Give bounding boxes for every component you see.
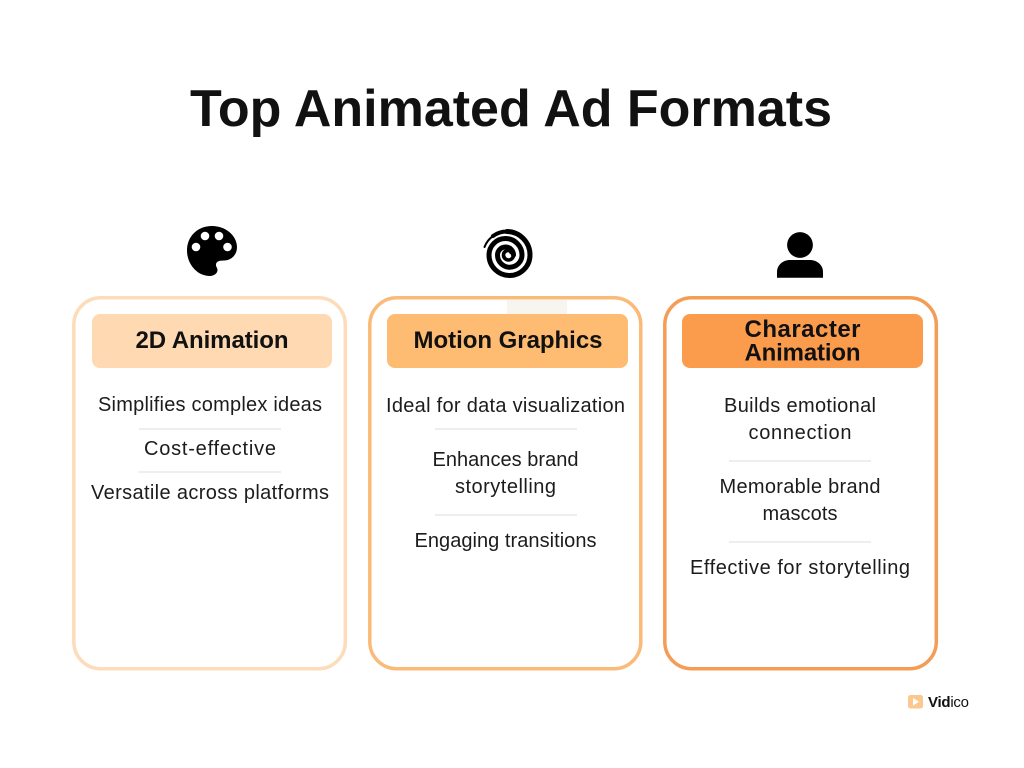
list: Character Animation points: Effective for storytelling — [690, 557, 910, 579]
list: Motion Graphics points: Enhances brand — [432, 449, 578, 471]
list: Character Animation points: mascots — [762, 503, 838, 525]
panel: Motion Graphics — [370, 298, 641, 669]
heading: Character Animation: Character — [744, 316, 860, 343]
heading: Motion Graphics — [387, 314, 628, 368]
list: Motion Graphics points: Ideal for data visualization — [386, 395, 625, 417]
list: 2D Animation points: Cost-effective — [144, 438, 276, 460]
list: 2D Animation points — [91, 394, 329, 504]
heading: 2D Animation — [92, 314, 332, 368]
logo: Vidico: Vidico — [928, 694, 969, 711]
panel: Character Animation — [665, 298, 936, 669]
list: 2D Animation points: Simplifies complex ideas — [98, 394, 322, 416]
list: 2D Animation points: Versatile across platforms — [91, 482, 329, 504]
icon: spiral — [484, 231, 530, 276]
heading: Motion Graphics: Motion Graphics — [414, 327, 602, 354]
list: Character Animation points — [690, 395, 910, 579]
panel: 2D Animation — [74, 298, 345, 669]
icon: palette — [187, 226, 237, 276]
icon: person — [777, 232, 823, 278]
heading: Character Animation — [682, 314, 923, 368]
logo: Vidico — [908, 694, 969, 711]
title: Top Animated Ad Formats — [190, 80, 832, 138]
heading: Character Animation: Animation — [744, 340, 860, 366]
list: Character Animation points: connection — [748, 422, 852, 444]
list: Character Animation points: Builds emotional — [724, 395, 876, 417]
list: Motion Graphics points: storytelling — [455, 476, 556, 498]
list: Motion Graphics points — [386, 395, 625, 552]
heading: 2D Animation: 2D Animation — [136, 327, 288, 354]
list: Motion Graphics points: Engaging transitions — [414, 530, 596, 552]
list: Character Animation points: Memorable brand — [720, 476, 880, 498]
